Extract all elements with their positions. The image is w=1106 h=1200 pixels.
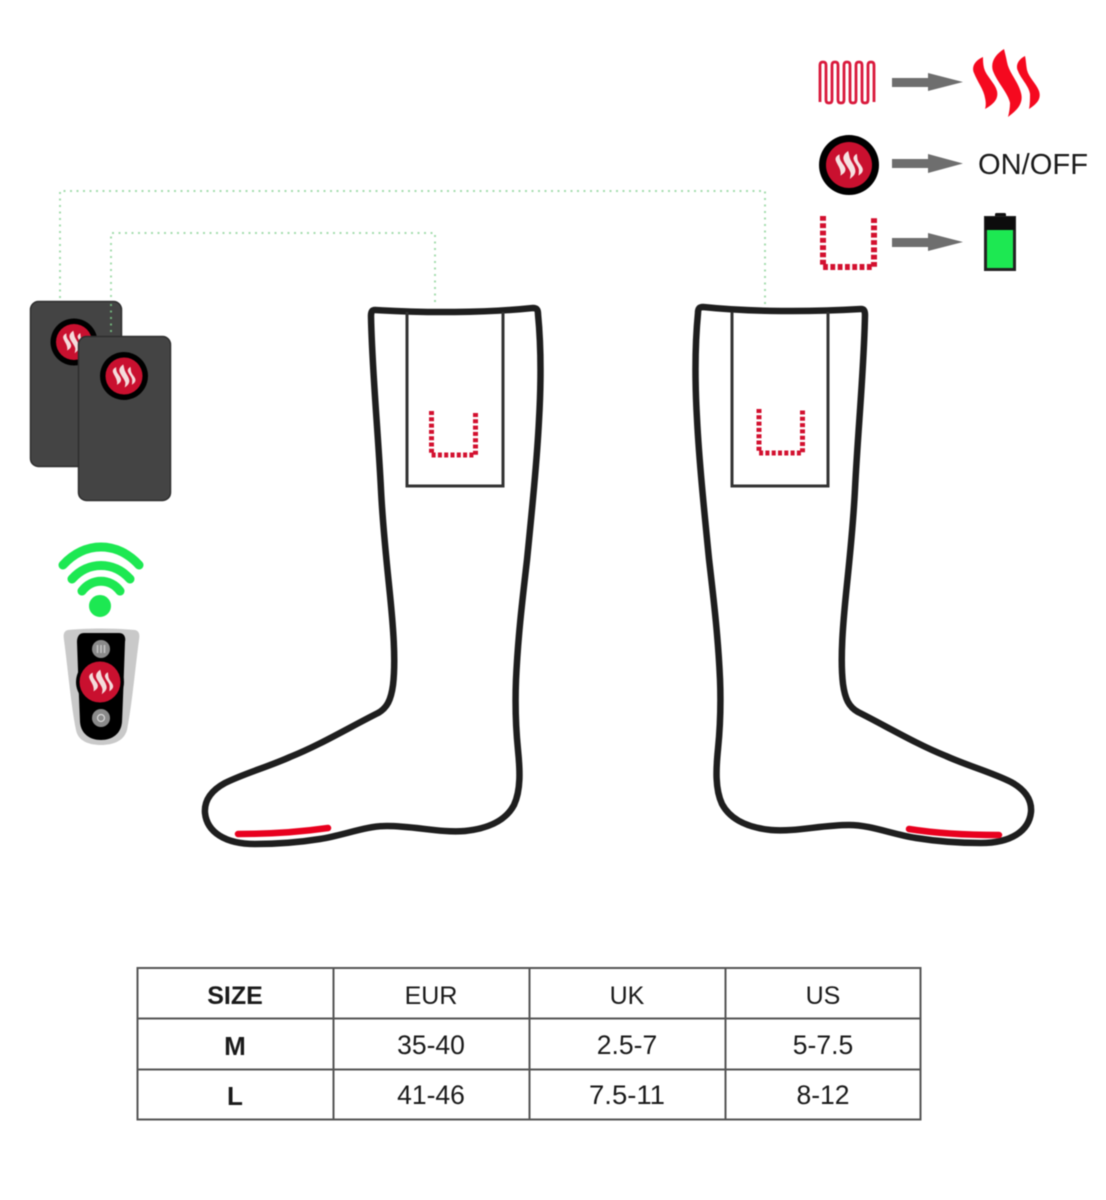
left sock <box>205 308 540 844</box>
remote face <box>77 633 125 740</box>
table row M: 35-40 <box>397 1030 465 1060</box>
front battery controller <box>78 336 170 500</box>
table row M <box>224 1030 853 1061</box>
back battery controller <box>30 302 122 466</box>
table header row: SIZE <box>207 982 263 1010</box>
remote body <box>64 628 139 745</box>
right sock heating strip <box>909 829 999 835</box>
table row M: 5-7.5 <box>793 1030 853 1060</box>
legend <box>819 49 1088 270</box>
table header row: EUR <box>405 982 457 1010</box>
table header row <box>207 982 840 1010</box>
diagram artwork <box>30 49 1088 844</box>
left sock outline <box>205 308 540 844</box>
back controller button <box>50 318 98 366</box>
icon: battery <box>985 213 1015 270</box>
icon: heat waves <box>973 49 1040 117</box>
table header row: UK <box>610 982 645 1010</box>
front controller button <box>100 352 148 400</box>
table header row: US <box>806 982 840 1010</box>
table row M: 2.5-7 <box>597 1030 657 1060</box>
right sock battery pocket <box>732 312 828 486</box>
arrow: button to on/off <box>892 154 963 173</box>
icon: wifi signal <box>63 547 139 613</box>
left sock battery symbol <box>432 411 476 455</box>
wiring from left controller to right sock <box>60 191 765 306</box>
right sock outline <box>696 307 1031 843</box>
table row L <box>227 1080 850 1111</box>
right sock <box>696 307 1031 843</box>
table row M: M <box>224 1031 246 1061</box>
icon: heat button <box>819 135 879 195</box>
left sock heating strip <box>238 828 328 834</box>
remote heat button <box>76 658 124 706</box>
back controller body <box>30 302 122 466</box>
table row L: 8-12 <box>796 1080 850 1110</box>
wiring from right controller to left sock <box>111 233 435 336</box>
front controller body <box>78 336 170 500</box>
remote power button <box>92 709 110 727</box>
icon: dotted battery symbol <box>823 216 874 267</box>
on/off label: ON/OFF <box>978 149 1088 181</box>
arrow: coil to heat <box>892 73 963 91</box>
remote control <box>64 628 139 745</box>
left sock battery pocket <box>407 312 503 486</box>
table row L: L <box>227 1081 243 1111</box>
arrow: symbol to battery <box>892 233 963 251</box>
table grid <box>138 968 920 1120</box>
back controller dotted wire overlay <box>110 304 112 336</box>
table row L: 7.5-11 <box>589 1080 665 1110</box>
table row L: 41-46 <box>397 1080 465 1110</box>
icon: heating coil <box>820 62 874 103</box>
right sock battery symbol <box>759 409 802 453</box>
size chart table <box>138 968 920 1120</box>
remote mode button <box>92 640 110 658</box>
